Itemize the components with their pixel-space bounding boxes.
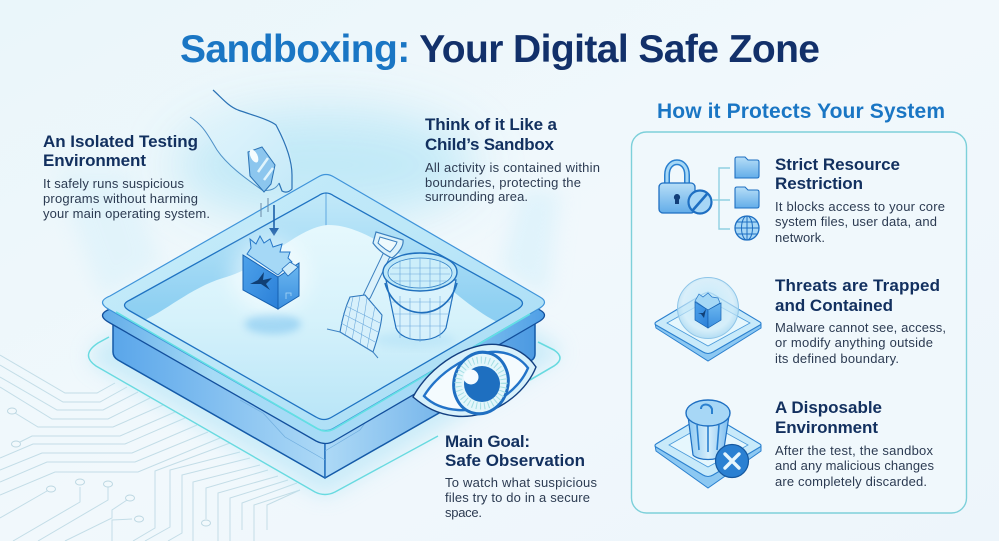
text block: child's sandbox: surrounding area. bbox=[425, 189, 528, 204]
glowing platform under tray bbox=[88, 212, 560, 495]
icon: drop arrow bbox=[261, 198, 279, 236]
text: strict resource restriction bbox=[775, 155, 945, 245]
text: disposable environment bbox=[775, 398, 934, 489]
text: threats trapped bbox=[775, 276, 946, 366]
text: strict resource restriction: Restriction bbox=[775, 174, 863, 193]
icon: lock and resources bbox=[659, 157, 759, 240]
tray interior and sand bbox=[124, 193, 522, 430]
icon: eye bbox=[413, 344, 536, 420]
icon: shovel bbox=[327, 232, 403, 358]
text: disposable environment: and any malicious changes bbox=[775, 458, 934, 473]
right panel heading: How it Protects Your System bbox=[657, 100, 945, 123]
tray rim bbox=[102, 174, 544, 444]
text: strict resource restriction: Strict Resource bbox=[775, 155, 900, 174]
text block: child's sandbox: All activity is contained within bbox=[425, 160, 600, 175]
text block: isolated testing environment: programs without harming bbox=[43, 191, 198, 206]
text block: main goal bbox=[445, 432, 598, 520]
circuit board traces bbox=[0, 355, 300, 541]
text: strict resource restriction: network. bbox=[775, 230, 825, 245]
text: strict resource restriction: It blocks access to your core bbox=[775, 199, 945, 214]
illustration: sandbox tray bbox=[88, 174, 560, 495]
text block: main goal: files try to do in a secure bbox=[445, 490, 590, 505]
icon: trash can with cross bbox=[655, 400, 761, 488]
text block: isolated testing environment: An Isolated Testing bbox=[43, 132, 198, 151]
text: disposable environment: are completely discarded. bbox=[775, 474, 927, 489]
text block: isolated testing environment: Environment bbox=[43, 151, 146, 170]
icon: bucket bbox=[383, 253, 457, 342]
text: threats trapped: its defined boundary. bbox=[775, 351, 899, 366]
text block: child's sandbox: boundaries, protecting the bbox=[425, 175, 581, 190]
text block: main goal: space. bbox=[445, 505, 482, 520]
text block: main goal: Safe Observation bbox=[445, 451, 585, 470]
text: disposable environment: After the test, the sandbox bbox=[775, 443, 934, 458]
title: Sandboxing: Your Digital Safe Zone bbox=[180, 28, 820, 71]
icon: trapped threat in sphere bbox=[655, 278, 761, 361]
text: threats trapped: Malware cannot see, access, bbox=[775, 320, 946, 335]
text: disposable environment: A Disposable bbox=[775, 398, 882, 417]
text: disposable environment: Environment bbox=[775, 418, 878, 437]
text: threats trapped: or modify anything outside bbox=[775, 335, 933, 350]
icon: hand dropping malware bbox=[190, 90, 293, 192]
text block: isolated testing environment bbox=[43, 132, 210, 221]
tray outer walls bbox=[113, 305, 535, 478]
text block: isolated testing environment: It safely runs suspicious bbox=[43, 176, 184, 191]
text block: main goal: To watch what suspicious bbox=[445, 475, 598, 490]
text: threats trapped: Threats are Trapped bbox=[775, 276, 940, 295]
text block: child's sandbox: Child’s Sandbox bbox=[425, 135, 555, 154]
text block: child's sandbox: Think of it Like a bbox=[425, 115, 558, 134]
icon: malware box bbox=[232, 236, 308, 314]
text block: child's sandbox bbox=[425, 115, 600, 204]
panel: how it protects bbox=[632, 132, 966, 513]
background glow and light beams bbox=[55, 110, 560, 300]
text block: isolated testing environment: your main operating system. bbox=[43, 206, 210, 221]
text block: main goal: Main Goal: bbox=[445, 432, 530, 451]
text: strict resource restriction: system files, user data, and bbox=[775, 214, 937, 229]
text: threats trapped: and Contained bbox=[775, 296, 893, 315]
